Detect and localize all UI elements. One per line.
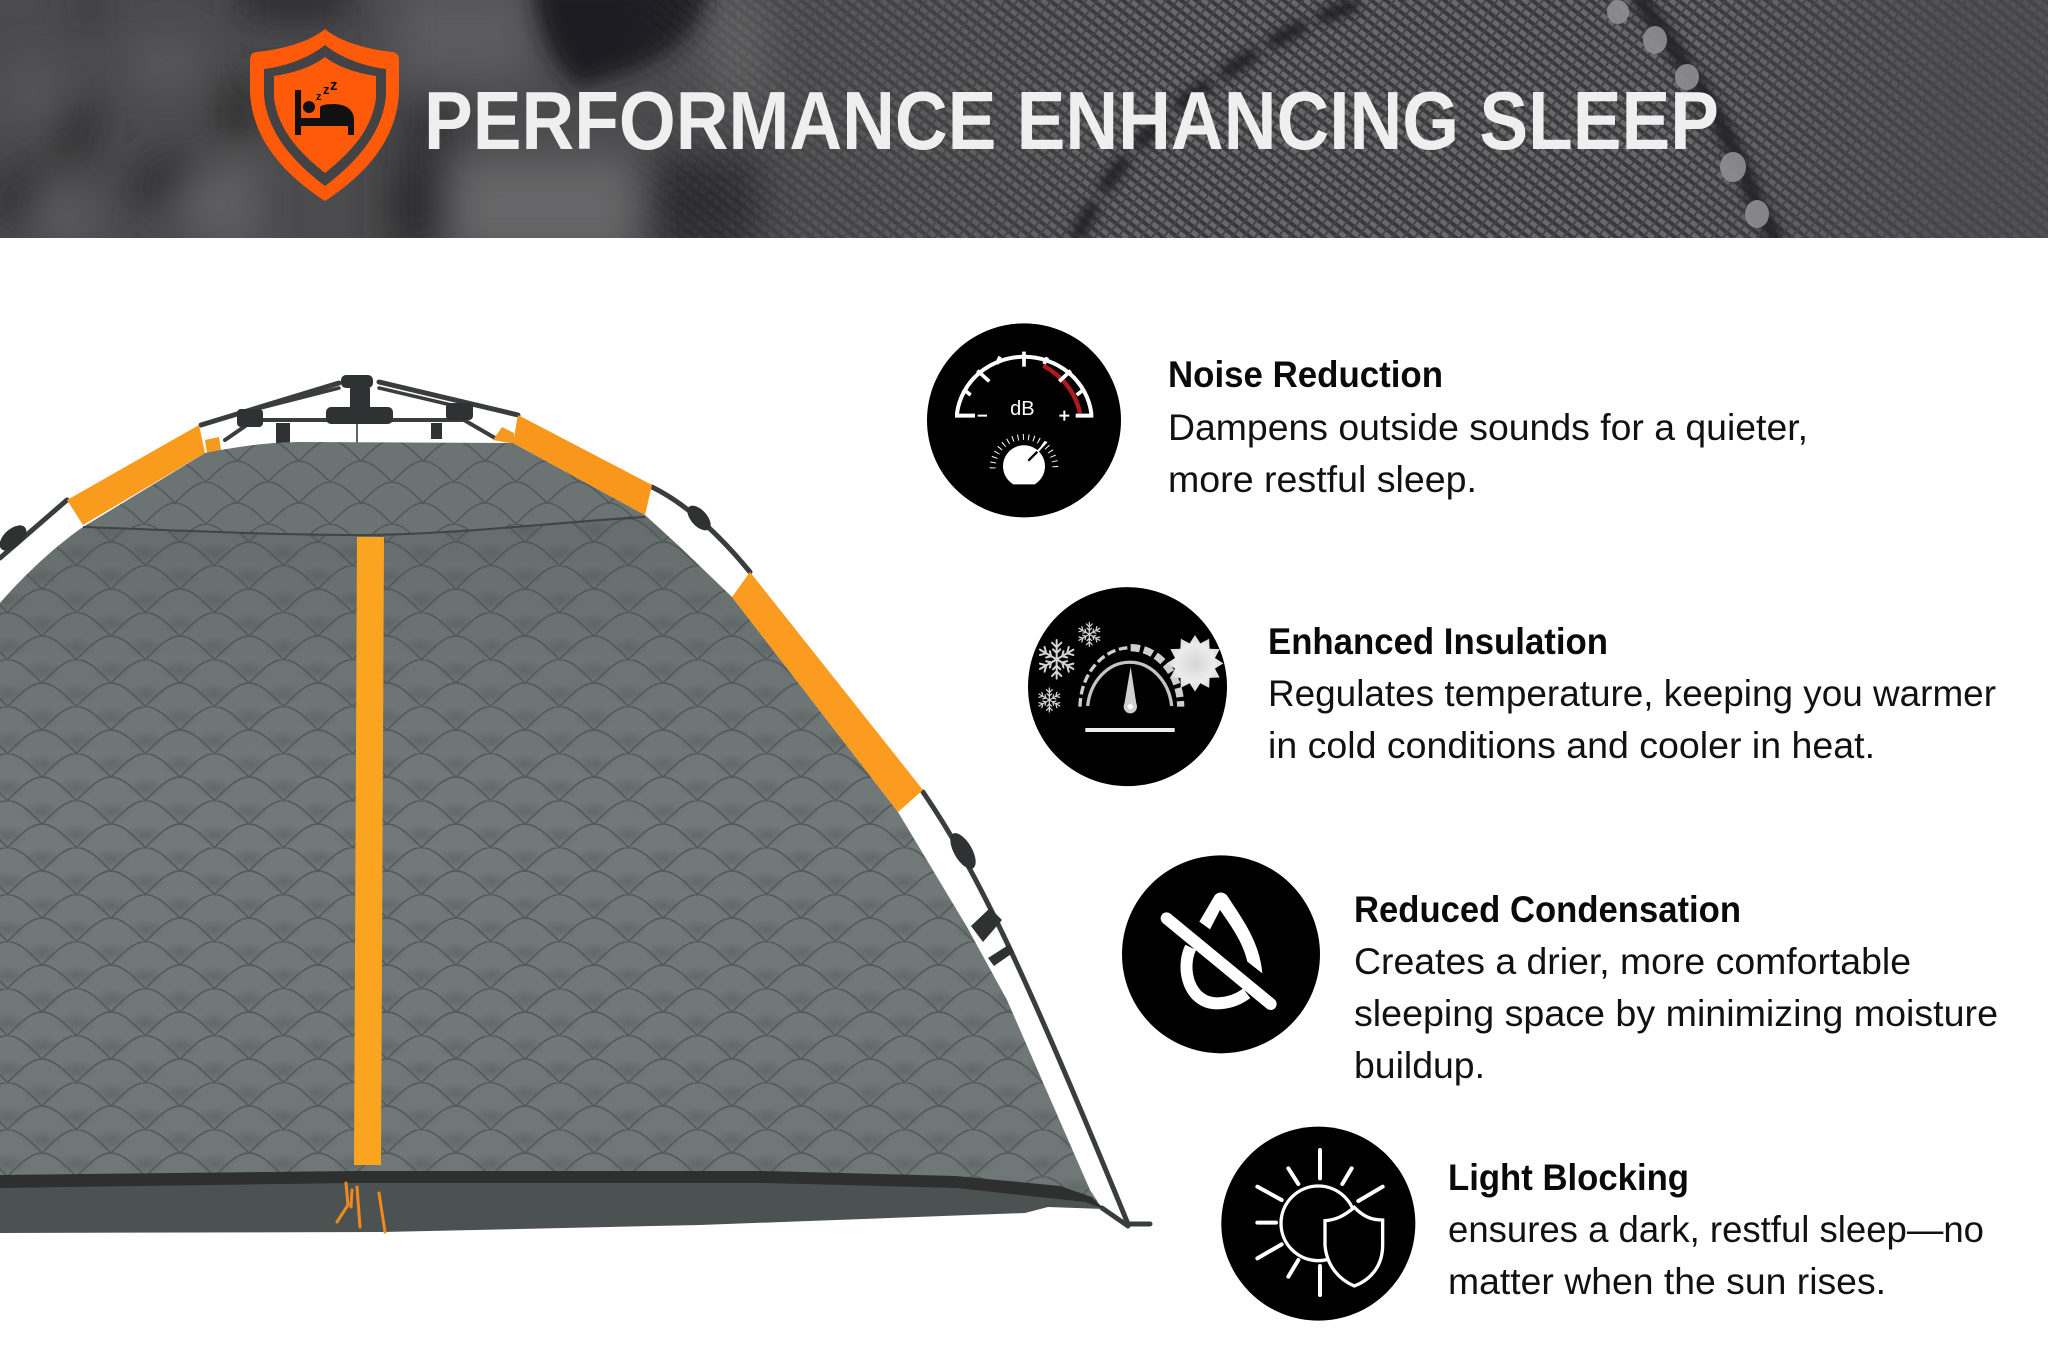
side orange strap: [732, 572, 923, 812]
icon: decibel gauge: dB: [1010, 398, 1035, 420]
description: Regulates temperature, keeping you warmer: [1268, 673, 1996, 714]
tent illustration: [0, 375, 1150, 1233]
description: more restful sleep.: [1168, 459, 1477, 500]
feature 2: enhanced insulation: [1028, 587, 1996, 786]
icon: orange shield with sleeping person: z: [330, 77, 338, 94]
title: PERFORMANCE ENHANCING SLEEP: [424, 74, 1719, 167]
feature 3: reduced condensation: [1122, 855, 1998, 1086]
small orange inner flaps: [205, 427, 514, 454]
main quilted body: [0, 515, 1098, 1202]
description: in cold conditions and cooler in heat.: [1268, 725, 1875, 766]
description: [1168, 407, 1808, 500]
zipper: [0, 1171, 1104, 1209]
icon: sun and shield: [1221, 1127, 1415, 1321]
right orange strap: [513, 415, 652, 515]
icon: temperature gauge: [1028, 587, 1227, 786]
heading: Enhanced Insulation: [1268, 621, 1608, 662]
description: matter when the sun rises.: [1448, 1261, 1886, 1302]
icon: orange shield with sleeping person: z: [323, 82, 330, 97]
icon: decibel gauge: [927, 323, 1121, 517]
panel seam: [83, 517, 645, 535]
icon: orange shield with sleeping person: [250, 29, 399, 201]
description: [1354, 941, 1998, 1086]
orange zipper pulls: [337, 1183, 385, 1232]
vertical orange door strip: [354, 537, 384, 1165]
heading: Reduced Condensation: [1354, 889, 1741, 930]
feature 1: noise reduction: [927, 323, 1808, 517]
feature 4: light blocking: [1221, 1127, 1984, 1321]
description: sleeping space by minimizing moisture: [1354, 993, 1998, 1034]
lower inner lining: [0, 1176, 1104, 1233]
icon: orange shield with sleeping person: z: [316, 91, 322, 103]
heading: Noise Reduction: [1168, 354, 1443, 395]
description: ensures a dark, restful sleep—no: [1448, 1209, 1984, 1250]
left orange strap: [67, 425, 205, 525]
description: [1448, 1209, 1984, 1302]
header banner: fabric texture: [0, 0, 2048, 255]
stitches along the seam: [1607, 0, 1769, 228]
upper quilted panel: [83, 442, 645, 535]
description: Dampens outside sounds for a quieter,: [1168, 407, 1808, 448]
description: buildup.: [1354, 1045, 1485, 1086]
description: Creates a drier, more comfortable: [1354, 941, 1911, 982]
heading: Light Blocking: [1448, 1157, 1689, 1198]
description: [1268, 673, 1996, 766]
icon: crossed out water drop: [1122, 855, 1320, 1053]
tent frame poles and hubs: [0, 375, 1150, 1226]
